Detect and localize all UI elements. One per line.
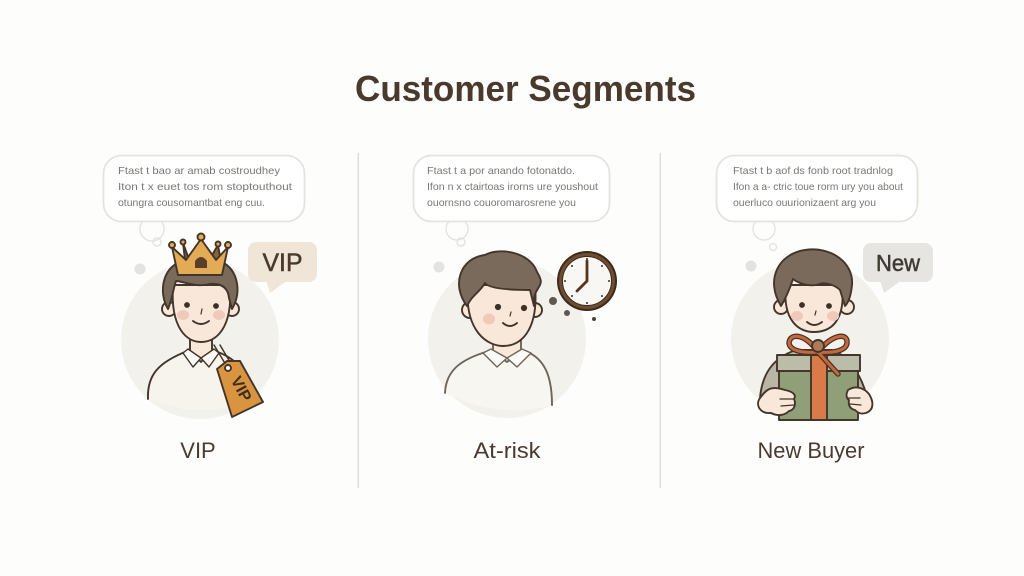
panel: VIP: [104, 156, 317, 463]
At-risk text bubble: [414, 156, 610, 246]
panel: At-risk: [414, 156, 617, 463]
VIP text bubble: otungra cousomantbat eng cuu.: [118, 197, 265, 209]
New Buyer text bubble: Ftast t b aof ds fonb root tradnlog: [733, 165, 893, 177]
New Buyer label: New Buyer: [758, 438, 864, 463]
At-risk person: [445, 251, 552, 410]
panel: New Buyer: [716, 156, 933, 463]
At-risk text bubble: Ftast t a por anando fotonatdo.: [427, 165, 575, 177]
icon: VIP tag: [214, 345, 263, 417]
New badge: [863, 243, 933, 293]
New badge: New: [876, 250, 920, 276]
title: Customer Segments: [355, 68, 696, 109]
At-risk text bubble: ouornsno couoromarosrene you: [427, 197, 576, 209]
VIP badge: [248, 242, 317, 293]
New Buyer text bubble: Ifon a a- ctric toue rorm ury you about: [733, 181, 903, 193]
VIP person: [148, 262, 250, 410]
icon: clock: [549, 251, 617, 321]
New Buyer person: [760, 249, 869, 412]
New Buyer text bubble: [716, 156, 918, 250]
icon: gift box: [758, 336, 872, 420]
At-risk text bubble: Ifon n x ctairtoas irorns ure youshout: [427, 181, 598, 193]
At-risk backdrop circle: [428, 260, 586, 418]
VIP text bubble: Iton t x euet tos rom stoptouthout: [118, 181, 292, 193]
VIP badge: VIP: [262, 249, 302, 277]
VIP label: VIP: [180, 438, 216, 463]
icon: VIP tag: VIP: [227, 374, 254, 405]
New Buyer backdrop circle: [731, 260, 889, 418]
VIP backdrop circle: [121, 261, 279, 419]
VIP text bubble: Ftast t bao ar amab costroudhey: [118, 165, 281, 177]
At-risk label: At-risk: [474, 438, 542, 463]
New Buyer text bubble: ouerluco ouurionizaent arg you: [733, 197, 876, 209]
icon: crown: [169, 234, 231, 275]
VIP text bubble: [104, 156, 304, 246]
